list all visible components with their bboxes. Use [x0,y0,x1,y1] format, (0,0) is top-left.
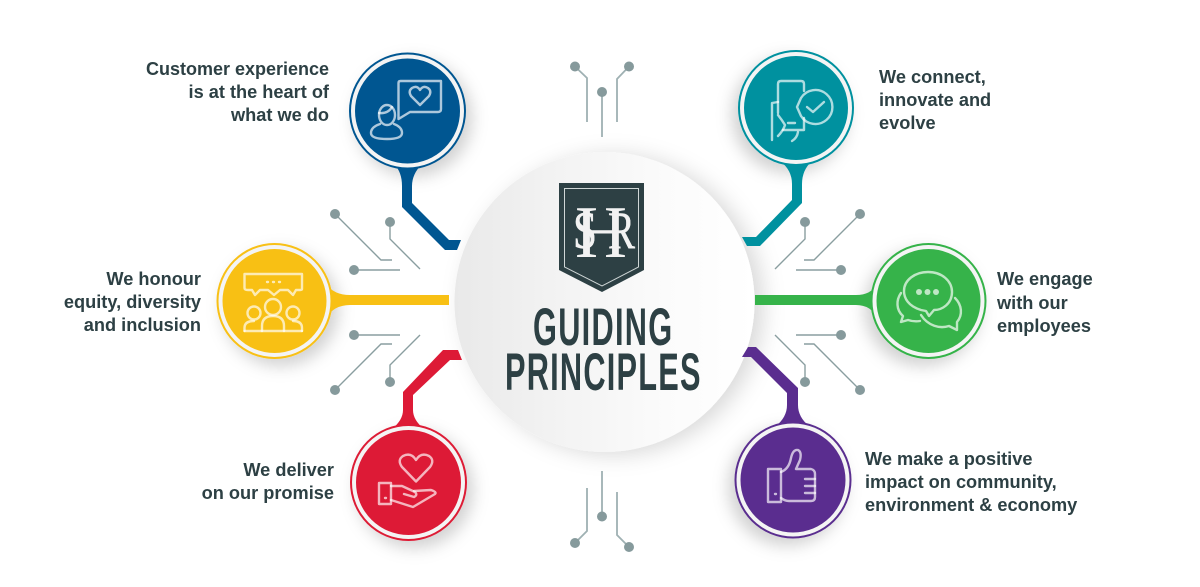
text: connect [879,67,991,133]
circuit lines: left [330,209,420,395]
icon: hand holding heart [379,455,436,507]
icon: thumbs up [768,450,815,502]
text: engage: employees [997,316,1091,336]
node: customer experience, blue [349,52,466,250]
circuit lines: right [775,209,865,395]
logo: shield monogram: S [573,202,597,260]
text: deliver [202,460,334,503]
text: honour: and inclusion [84,315,201,335]
logo: shield monogram: H [575,192,627,274]
heading: guiding: GUIDING [533,299,672,357]
panel: central circle [454,152,754,452]
text: honour: equity, diversity [64,292,202,312]
text: engage: We engage [997,269,1093,289]
text: positive impact: impact on community, [865,472,1057,492]
icon: person with heart speech bubble [371,81,441,139]
node: deliver on promise, red [350,350,467,541]
circuit lines: top [570,62,634,137]
icon: chat bubbles [897,272,961,330]
heading: principles: PRINCIPLES [505,344,700,402]
text: customer experience: what we do [230,105,329,125]
logo: shield monogram [559,183,644,292]
icon: chat dots [916,289,939,295]
text: positive impact: environment & economy [865,495,1078,515]
text: customer experience: is at the heart of [189,82,330,102]
text: deliver: on our promise [202,483,334,503]
text: connect: We connect, [879,67,986,87]
text: positive impact: We make a positive [865,449,1032,469]
text: honour [64,269,202,335]
logo: shield monogram: R [608,202,635,260]
node: equity diversity inclusion, yellow [216,243,449,359]
text: customer experience [146,59,330,125]
circuit lines: bottom [570,471,634,552]
node: connect and innovate, teal [738,50,854,246]
text: engage [996,269,1093,336]
text: connect: evolve [879,113,936,133]
text: positive impact [865,449,1078,515]
text: engage: with our [996,293,1068,313]
icon: phone with check mark [772,81,832,141]
node: positive impact, purple [734,347,852,538]
text: deliver: We deliver [243,460,334,480]
node: engage employees, green [755,243,986,359]
icon: group of people with speech banner [244,274,302,331]
text: connect: innovate and [879,90,991,110]
text: customer experience: Customer experience [146,59,329,79]
text: honour: We honour [106,269,201,289]
